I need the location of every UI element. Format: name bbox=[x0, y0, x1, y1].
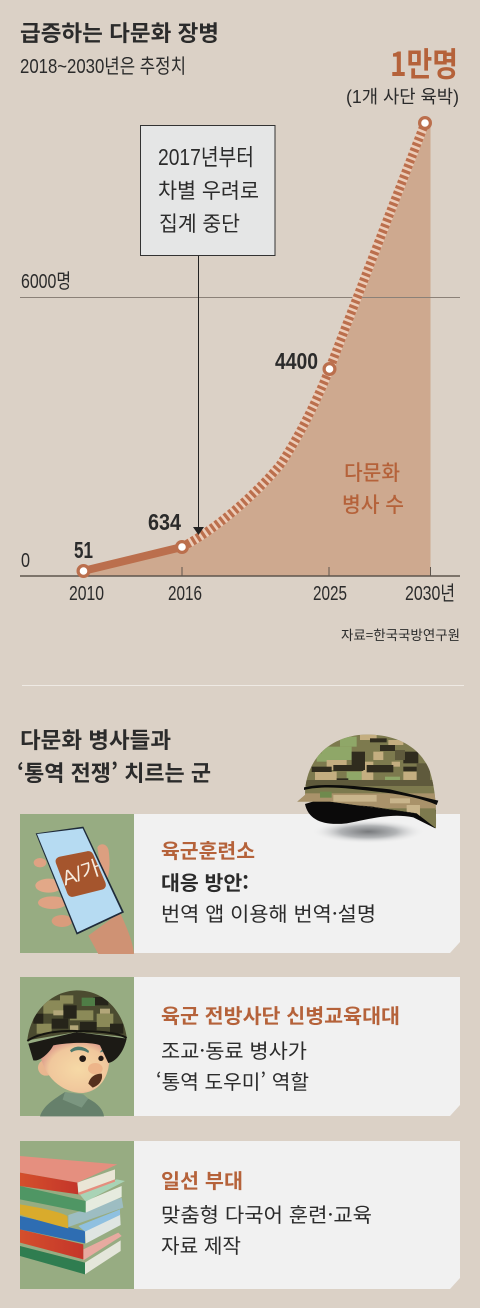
callout box: 차별 우려로 bbox=[158, 175, 259, 205]
section heading: ‘통역 전쟁’ 치르는 군 bbox=[17, 756, 211, 788]
icon: soldier character bbox=[27, 990, 127, 1116]
section heading: 다문화 병사들과 bbox=[20, 723, 171, 755]
icon: stack of books bbox=[20, 1156, 125, 1274]
callout box: 집계 중단 bbox=[159, 208, 240, 238]
arrow to 2017 bbox=[193, 255, 204, 535]
x axis labels bbox=[69, 582, 455, 605]
card text bbox=[156, 1000, 400, 1095]
title block bbox=[20, 16, 219, 78]
line chart: multicultural soldiers bbox=[20, 38, 460, 605]
card background bbox=[20, 977, 460, 1116]
value labels: 51 bbox=[74, 537, 93, 563]
card text: ‘통역 도우미’ 역할 bbox=[156, 1066, 309, 1095]
card text bbox=[161, 835, 376, 927]
area fill bbox=[83, 123, 430, 576]
actual solid line bbox=[83, 547, 182, 571]
source: 자료=한국국방연구원 bbox=[341, 624, 460, 644]
card text: 일선 부대 bbox=[161, 1165, 243, 1194]
card text: 자료 제작 bbox=[161, 1230, 241, 1259]
x axis labels: 2016 bbox=[168, 583, 202, 605]
y axis labels bbox=[21, 270, 71, 572]
y axis labels: 6000명 bbox=[21, 270, 71, 293]
x axis labels: 2025 bbox=[313, 583, 347, 605]
card text: 육군 전방사단 신병교육대대 bbox=[161, 1000, 400, 1029]
title block: 급증하는 다문화 장병 bbox=[20, 16, 219, 48]
card text: 번역 앱 이용해 번역·설명 bbox=[161, 898, 376, 927]
y axis labels: 0 bbox=[21, 550, 30, 572]
icon tile bbox=[20, 1141, 134, 1289]
panel: frontline division recruit training bbox=[20, 977, 460, 1116]
card text: 대응 방안: bbox=[161, 867, 249, 896]
card background bbox=[20, 1141, 460, 1289]
card background bbox=[20, 814, 460, 953]
series label bbox=[342, 457, 404, 519]
value labels: 634 bbox=[148, 509, 181, 535]
projected dashed line bbox=[182, 123, 425, 547]
card text: 조교·동료 병사가 bbox=[161, 1035, 307, 1064]
data markers bbox=[78, 118, 430, 576]
value labels: 4400 bbox=[275, 348, 318, 374]
icon: hand holding phone bbox=[34, 827, 134, 954]
value labels: (1개 사단 육박) bbox=[346, 87, 459, 107]
value labels: 1만명 bbox=[390, 38, 458, 86]
panel: training centre bbox=[20, 814, 460, 954]
x axis labels: 2030년 bbox=[405, 582, 455, 605]
panel: frontline units bbox=[20, 1141, 460, 1289]
value labels bbox=[74, 38, 459, 563]
title block: 2018~2030년은 추정치 bbox=[20, 55, 186, 78]
icon: camouflage helmet bbox=[297, 732, 438, 844]
series label: 병사 수 bbox=[342, 489, 404, 519]
axis bbox=[20, 567, 460, 576]
6000 gridline bbox=[20, 296, 460, 298]
callout box bbox=[140, 126, 275, 256]
icon tile bbox=[20, 977, 134, 1116]
section heading bbox=[17, 723, 211, 788]
card text bbox=[161, 1165, 372, 1259]
series label: 다문화 bbox=[344, 457, 400, 487]
icon: hand holding phone: A/가 bbox=[59, 857, 103, 890]
callout box: 2017년부터 bbox=[158, 144, 254, 170]
card text: 맞춤형 다국어 훈련·교육 bbox=[161, 1199, 372, 1228]
icon tile bbox=[20, 814, 134, 953]
x axis labels: 2010 bbox=[69, 583, 104, 605]
card text: 육군훈련소 bbox=[161, 835, 255, 864]
